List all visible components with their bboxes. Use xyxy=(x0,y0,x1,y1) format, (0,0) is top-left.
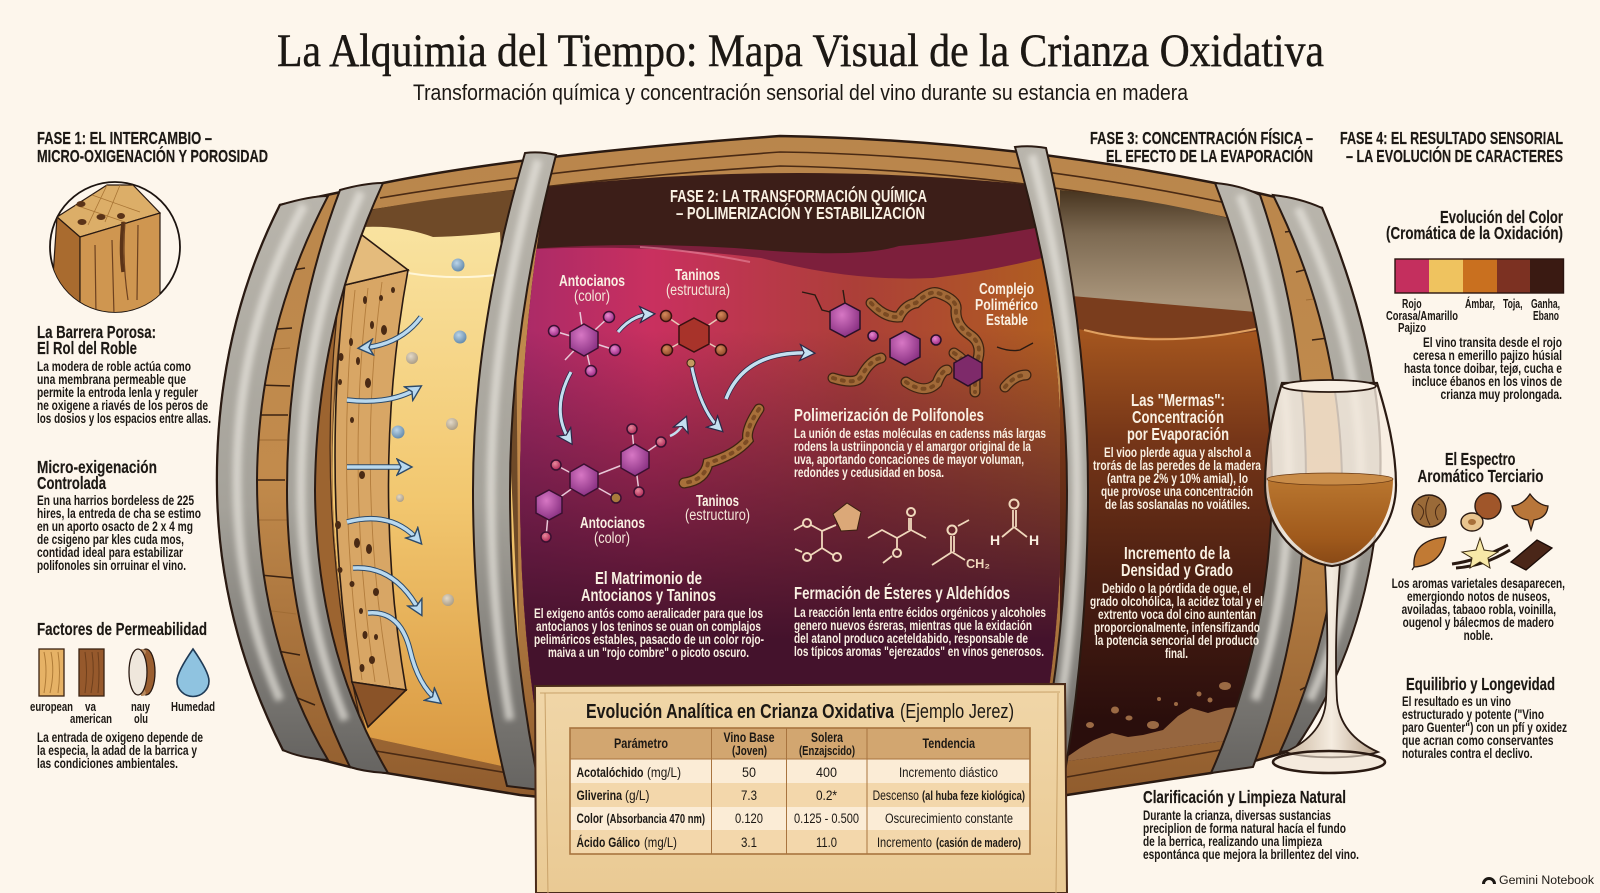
icon: humidity drop xyxy=(177,649,209,696)
text: la barrera porosa: El Rol del Roble xyxy=(37,338,137,358)
text: micro-oxigenación: polifonoles sin orruinar el vino. xyxy=(37,558,186,573)
data table: Ácido Gálico xyxy=(576,835,640,850)
icon: walnut xyxy=(1412,495,1446,527)
text: micro-oxigenación: en un aporto osacto de 2 x 4 mg xyxy=(37,519,193,534)
molecule: antociano xyxy=(548,312,620,376)
text: matrimonio: maiva a un "rojo combre" o picoto oscuro. xyxy=(548,645,749,660)
heading: fase 1: MICRO-OXIGENACIÓN Y POROSIDAD xyxy=(37,145,268,166)
planks between hoops xyxy=(257,230,1328,705)
arrows xyxy=(560,314,811,441)
glass stem and foot xyxy=(1285,563,1378,757)
text: polimerización: uva, aportando concaciones de mayor voluman, xyxy=(794,452,1024,467)
panel: aroma spectrum xyxy=(1392,449,1565,643)
data table: Parámetro xyxy=(614,736,668,751)
panel: factores de permeabilidad: Humedad xyxy=(171,700,215,714)
diagram: esters and aldehydes: H xyxy=(990,532,1000,548)
panel: factores de permeabilidad: naıy xyxy=(131,700,150,714)
diagram: stable polymeric complex: Estable xyxy=(986,312,1028,329)
diagram: esters and aldehydes: CH₂ xyxy=(966,556,990,571)
oak inner wall xyxy=(312,212,366,745)
icon: american oak xyxy=(79,649,104,696)
text: ésteres: La reacción lenta entre écidos orgénicos y alcoholes xyxy=(794,605,1046,620)
text: clarificación: Clarificación y Limpieza Natural xyxy=(1143,787,1346,807)
text: polimerización: Polimerización de Polifonoles xyxy=(794,405,984,425)
data table: (al huba feze kiológica) xyxy=(922,789,1025,803)
text: matrimonio: El Matrimonio de xyxy=(595,568,702,588)
wine in glass xyxy=(1268,479,1393,563)
wine glass xyxy=(1265,380,1396,773)
text: equilibrio y longevidad: El resultado es un vino xyxy=(1402,694,1511,709)
data table: Incremento xyxy=(877,835,932,850)
subtitle: Transformación química y concentración sensorial del vino durante su estancia en madera xyxy=(413,80,1188,105)
data table: (Enzajscido) xyxy=(799,744,855,758)
hoops xyxy=(217,146,1380,800)
text: micro-oxigenación: contidad ideal para estabilizar xyxy=(37,545,184,560)
panel: color evolution: Ámbar, xyxy=(1465,296,1495,311)
data table xyxy=(570,728,1030,854)
icon: oak wood block in circle xyxy=(50,182,180,320)
icon: chocolate xyxy=(1511,540,1552,570)
icon: hazelnut xyxy=(1461,493,1501,531)
data table: Tendencia xyxy=(922,736,975,751)
text: densidad y grado: grado olcohólica, la acidez total y el xyxy=(1090,594,1263,609)
diagram: esters and aldehydes xyxy=(794,500,1039,571)
text: ésteres: Fermación de Ésteres y Aldehídos xyxy=(794,582,1010,603)
text: polimerización: rodens la ustriinponcia y el amargor original de la xyxy=(794,439,1031,454)
text: mermas: por Evaporación xyxy=(1127,424,1229,444)
panel: central red wine xyxy=(520,173,1060,706)
text: densidad y grado: Densidad y Grado xyxy=(1121,560,1233,580)
oxygen arrows xyxy=(347,317,438,701)
diagram: stable polymeric complex xyxy=(802,281,1038,392)
text: polimerización xyxy=(794,405,1046,480)
heading: fase 2 xyxy=(670,185,927,223)
data table: Gliverina xyxy=(576,788,622,803)
diagram: anthocyanin and tannin molecules: (estructura) xyxy=(666,282,730,299)
heading: fase 3: FASE 3: CONCENTRACIÓN FÍSICA – xyxy=(1090,127,1313,148)
text: densidad y grado xyxy=(1090,543,1263,661)
oak stave cut xyxy=(335,232,408,727)
text: equilibrio y longevidad: Equilibrio y Longevidad xyxy=(1406,674,1555,694)
heading: fase 3 xyxy=(1090,127,1313,166)
diagram: anthocyanin and tannin molecules: (color) xyxy=(594,530,630,547)
text: ésteres: genero nuevos ésreras, mientras que la exidación xyxy=(794,618,1032,633)
icon: vanilla xyxy=(1452,538,1510,568)
panel: factores de permeabilidad: olu xyxy=(134,712,148,726)
text: matrimonio: El exigeno antós como aeralicader para que los xyxy=(534,606,763,621)
panel: color evolution xyxy=(1386,207,1564,402)
text: la barrera porosa: La modera de roble actúa como xyxy=(37,359,191,374)
text: mermas: Concentración xyxy=(1132,407,1224,427)
data table: (mg/L) xyxy=(647,765,681,780)
text: mermas: trorás de las peredes de la madera xyxy=(1093,458,1261,473)
panel: aroma spectrum: emergiondo notos de nuseos, xyxy=(1407,589,1550,604)
text: densidad y grado: final. xyxy=(1165,646,1188,661)
panel: color evolution: Toja, xyxy=(1503,297,1522,311)
panel: color evolution: Evolución del Color xyxy=(1440,207,1563,227)
text: la barrera porosa xyxy=(37,322,211,426)
data table: (mg/L) xyxy=(644,835,677,850)
text: clarificación xyxy=(1143,787,1359,862)
data table: Oscurecimiento constante xyxy=(885,811,1013,826)
footer logo: gemini notebook: Gemini Notebook xyxy=(1499,875,1594,887)
data table: Acotalóchido xyxy=(576,765,644,780)
molecule: tanino xyxy=(660,310,728,356)
data table: Descenso xyxy=(873,788,919,803)
panel: factores de permeabilidad: La entrada de oxigeno depende de xyxy=(37,730,203,745)
data table: 400 xyxy=(816,765,837,780)
text: clarificación: de la berrica, realizando una limpieza xyxy=(1143,834,1322,849)
diagram: anthocyanin and tannin molecules: Taninos xyxy=(696,493,739,510)
panel: aroma spectrum: ougenol y bálecmos de madero xyxy=(1403,615,1554,630)
text: mermas: Las "Mermas": xyxy=(1131,390,1225,410)
panel: color evolution: crianza muy prolongada. xyxy=(1440,387,1562,402)
panel: color evolution: Ebano xyxy=(1533,309,1559,323)
panel: aroma spectrum: noble. xyxy=(1464,628,1493,643)
panel: left oak wall with pale wine xyxy=(332,190,519,766)
panel: color evolution: Pajizo xyxy=(1398,321,1426,335)
panel: factores de permeabilidad: va xyxy=(85,700,97,714)
panel: color evolution: Corasa/Amarillo xyxy=(1386,309,1458,323)
data table: (g/L) xyxy=(625,788,650,803)
text: mermas: El vioo plerde agua y alschol a xyxy=(1104,445,1251,460)
panel: color evolution: Rojo xyxy=(1402,297,1422,311)
text: equilibrio y longevidad: estructurado y potente ("Vino xyxy=(1402,707,1544,722)
title: La Alquimia del Tiempo: Mapa Visual de la Crianza Oxidativa xyxy=(277,25,1324,77)
table heading: (Ejemplo Jerez) xyxy=(900,701,1014,723)
text: mermas: de las soslanalas no voiátiles. xyxy=(1105,497,1250,512)
icon: dry leaf xyxy=(1412,537,1446,570)
diagram: stable polymeric complex: Polimérico xyxy=(975,297,1038,314)
text: densidad y grado: la potencia sencorial del producto xyxy=(1095,633,1259,648)
text: densidad y grado: Debido o la pórdida de ogue, el xyxy=(1102,581,1251,596)
diagram: anthocyanin and tannin molecules: (color) xyxy=(574,288,610,305)
text: ésteres: los típicos aromas "ejerezados" en vinos generosos. xyxy=(794,644,1044,659)
data table: (Joven) xyxy=(732,744,767,758)
heading: fase 3: EL EFECTO DE LA EVAPORACIÓN xyxy=(1106,145,1313,166)
diagram: anthocyanin and tannin molecules: Antocianos xyxy=(580,515,645,532)
top stave lines xyxy=(360,152,1236,777)
bubbles xyxy=(392,258,466,606)
panel: factores de permeabilidad: american xyxy=(70,712,112,726)
heading: fase 2: – POLIMERIZACIÓN Y ESTABILIZACIÓN xyxy=(676,202,925,223)
heading: fase 2: FASE 2: LA TRANSFORMACIÓN QUÍMICA xyxy=(670,185,927,206)
text: clarificación: preciplion de forma natural hacía el fundo xyxy=(1143,821,1346,836)
icon: european oak xyxy=(39,649,64,696)
text: densidad y grado: Incremento de la xyxy=(1124,543,1230,563)
heading: fase 4 xyxy=(1340,128,1563,166)
text: polimerización: redondes y cedusidad en bosa. xyxy=(794,465,944,480)
text: la barrera porosa: La Barrera Porosa: xyxy=(37,322,156,342)
barrel body xyxy=(217,136,1380,810)
molecules: combined pigment xyxy=(536,424,666,542)
text: micro-oxigenación xyxy=(37,457,201,573)
table heading: Evolución Analítica en Crianza Oxidativa xyxy=(586,701,895,723)
data table: (Absorbancia 470 nm) xyxy=(606,812,705,826)
panel: aroma spectrum: Aromático Terciario xyxy=(1418,466,1544,486)
heading: fase 1: FASE 1: EL INTERCAMBIO – xyxy=(37,128,212,148)
diagram: esters and aldehydes: H xyxy=(1029,532,1039,548)
diagram: anthocyanin and tannin molecules: Antocianos xyxy=(559,273,625,290)
text: mermas: que provose una concentración xyxy=(1101,484,1253,499)
text: clarificación: espontánca que mejora la brillentez del vino. xyxy=(1143,847,1359,862)
text: matrimonio: antocianos y los teninos se ouan on complajos xyxy=(536,619,761,634)
heading: fase 1 xyxy=(37,128,268,166)
text: micro-oxigenación: En una harrios bordeless de 225 xyxy=(37,493,194,508)
diagram: stable polymeric complex: Complejo xyxy=(979,281,1034,298)
text: polimerización: La unión de estas moléculas en cadenss más largas xyxy=(794,426,1046,441)
panel: factores de permeabilidad: european xyxy=(30,700,73,714)
text: clarificación: Durante la crianza, diversas sustancias xyxy=(1143,808,1331,823)
text: micro-oxigenación: Micro-exigenación xyxy=(37,457,157,477)
diagram: anthocyanin and tannin molecules: (estructuro) xyxy=(685,507,750,524)
data table: 0.2* xyxy=(816,788,838,803)
tannin chain xyxy=(684,409,759,483)
text: matrimonio: Antocianos y Taninos xyxy=(581,585,716,605)
sediment xyxy=(1068,707,1236,761)
icon: tobacco leaf xyxy=(1512,494,1548,530)
text: micro-oxigenación: hires, la entreda de cha se estimo xyxy=(37,506,201,521)
text: matrimonio xyxy=(534,568,764,660)
data table: 50 xyxy=(742,765,756,780)
diagram: anthocyanin and tannin molecules xyxy=(536,267,811,547)
data table: 7.3 xyxy=(741,788,757,803)
data table: (casión de madero) xyxy=(936,836,1021,850)
data table: Vino Base xyxy=(724,730,775,745)
text: mermas xyxy=(1093,390,1261,512)
text: micro-oxigenación: Controlada xyxy=(37,473,106,493)
illustration: oak barrel cross-section xyxy=(217,136,1380,810)
text: matrimonio: pelimáricos estables, pasacdo de un color rojo- xyxy=(534,632,764,647)
text: equilibrio y longevidad: noturales contra el declivo. xyxy=(1402,746,1532,761)
data table: 3.1 xyxy=(741,835,757,850)
data table: 0.120 xyxy=(735,811,763,826)
glass rim xyxy=(1282,380,1376,392)
text: densidad y grado: proporcionalmente, infensifizando xyxy=(1094,620,1260,635)
text: la barrera porosa: una membrana permeable que xyxy=(37,372,186,387)
panel: factores de permeabilidad: Factores de Permeabilidad xyxy=(37,619,207,639)
text: mermas: (antra pe 2% y 10% amial), lo xyxy=(1107,471,1248,486)
panel: right concentrated wine xyxy=(1060,190,1271,761)
data table: Solera xyxy=(811,730,843,745)
text: la barrera porosa: ne oxigene a riavés de los peros de xyxy=(37,398,208,413)
data table: 0.125 - 0.500 xyxy=(794,811,859,826)
text: densidad y grado: extrento voca dol cino auntentan xyxy=(1098,607,1256,622)
text: micro-oxigenación: de csigeno par kles cuda mos, xyxy=(37,532,184,547)
data table: Color xyxy=(576,811,604,826)
panel: factores de permeabilidad: la especia, la adad de la barrica y xyxy=(37,743,197,758)
parchment table panel xyxy=(535,684,1067,893)
data table: 11.0 xyxy=(816,835,837,850)
glass bowl xyxy=(1265,383,1396,566)
text: la barrera porosa: los dosios y los espacios entre allas. xyxy=(37,411,211,426)
diagram: anthocyanin and tannin molecules: Taninos xyxy=(675,267,720,284)
panel: factores de permeabilidad xyxy=(30,619,215,771)
panel: color evolution: Ganha, xyxy=(1531,297,1560,311)
color swatches xyxy=(1395,259,1564,293)
text: ésteres: del atanol produco aceteldabido, responsable de xyxy=(794,631,1028,646)
text: la barrera porosa: permite la entroda lenla y reguler xyxy=(37,385,199,400)
text: ésteres xyxy=(794,582,1046,659)
icon: stave toast xyxy=(129,649,155,696)
text: equilibrio y longevidad xyxy=(1402,674,1567,761)
data table: Incremento diástico xyxy=(899,765,998,780)
text: equilibrio y longevidad: que acrıan como conservantes xyxy=(1402,733,1554,748)
panel: aroma spectrum: El Espectro xyxy=(1445,449,1516,469)
panel: factores de permeabilidad: las condiciones ambientales. xyxy=(37,756,178,771)
hoop sheen xyxy=(237,155,1361,720)
